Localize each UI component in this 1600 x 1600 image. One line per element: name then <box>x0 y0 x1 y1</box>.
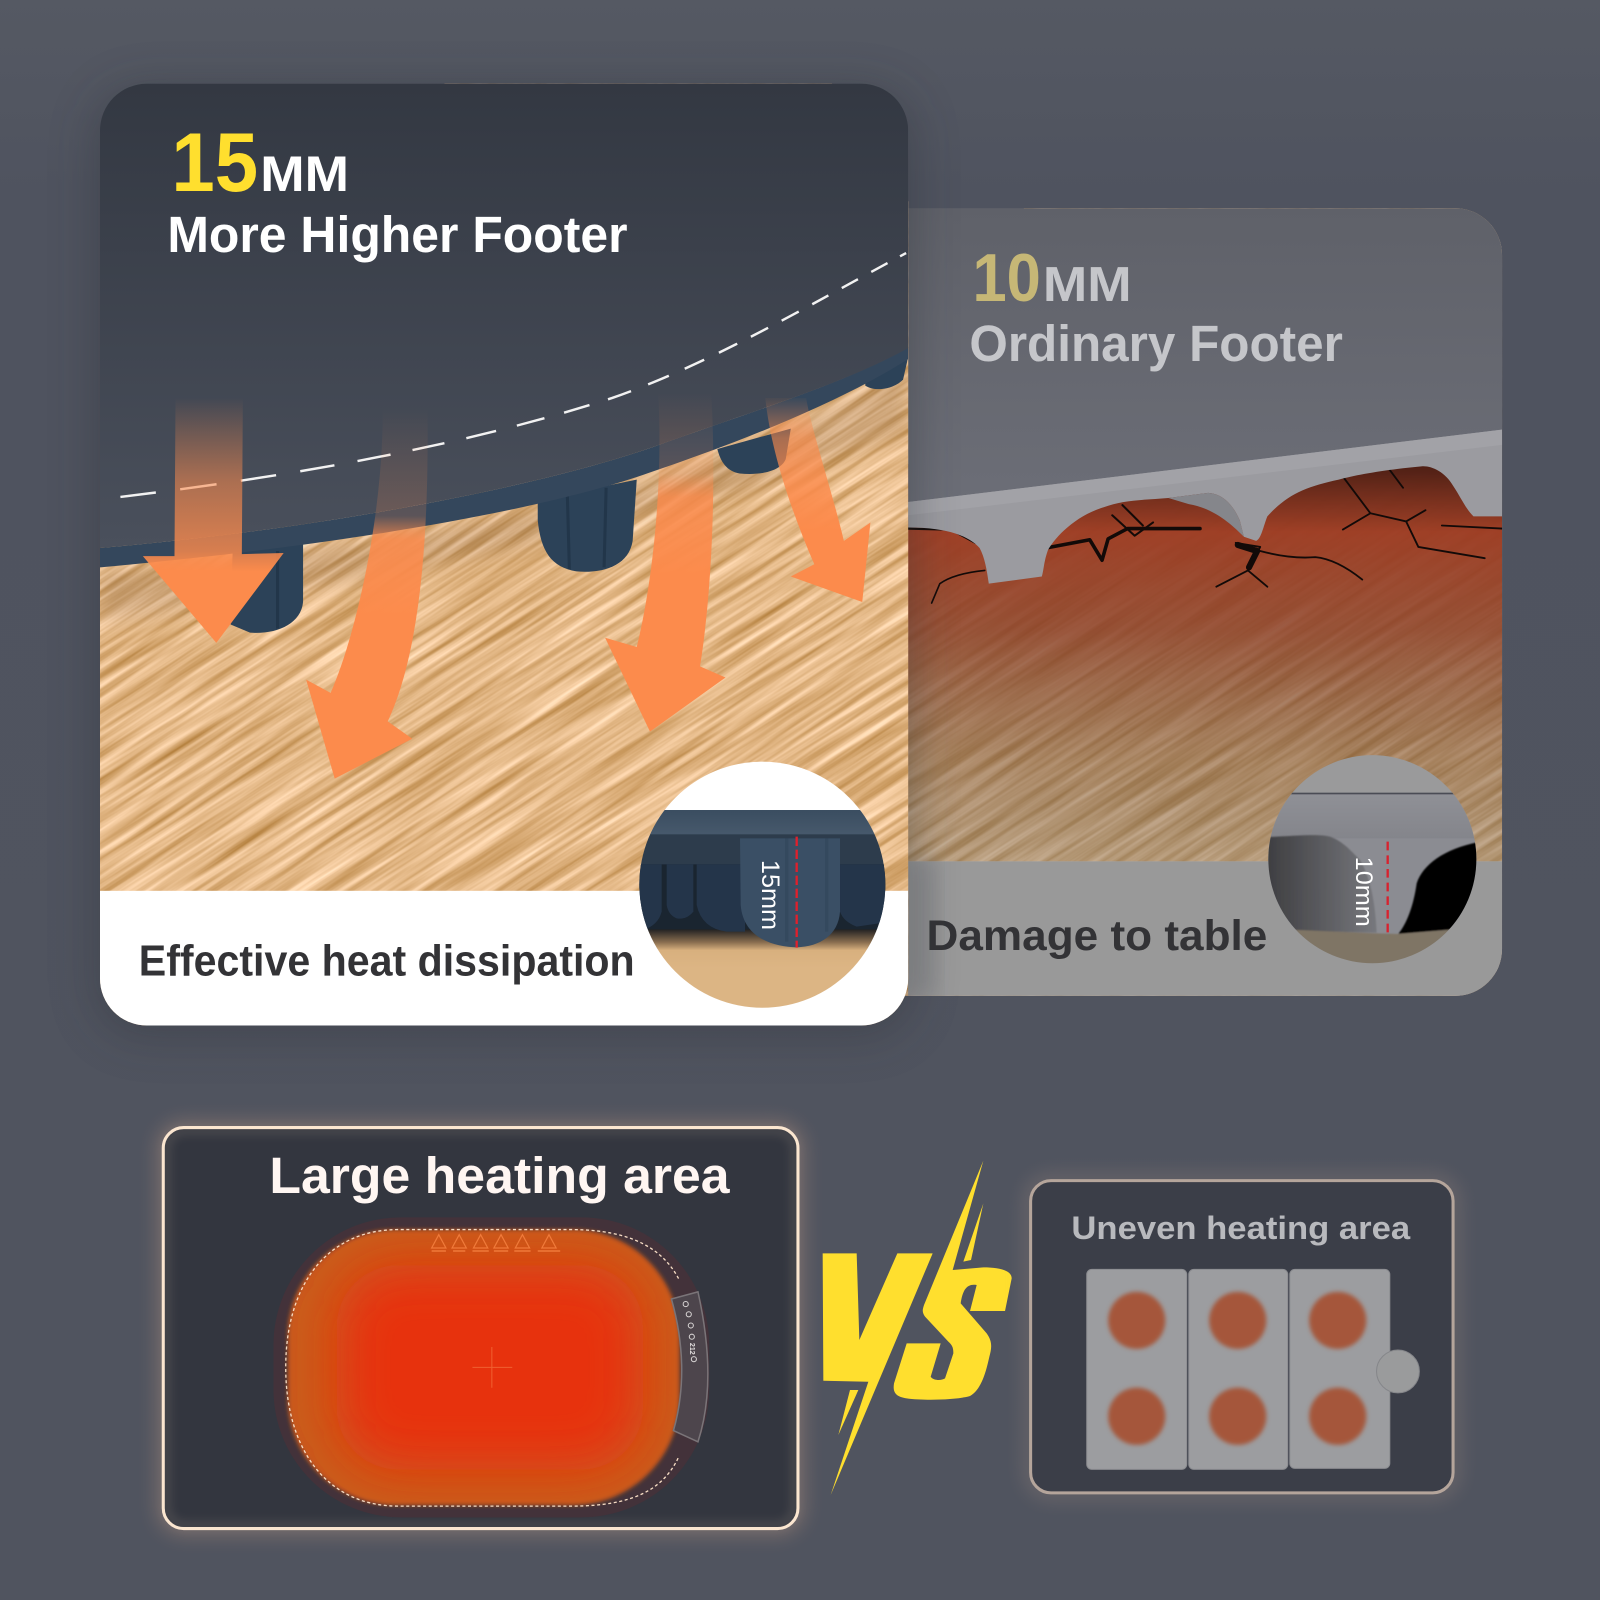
control panel <box>671 1292 708 1442</box>
heated mat <box>273 1217 709 1517</box>
inset: 15mm foot close-up <box>639 762 886 1008</box>
panel: 15mm footer <box>100 84 908 1026</box>
heading: 10mm ordinary footer <box>969 241 1343 372</box>
panel: uneven heating area <box>1031 1181 1453 1493</box>
heading: 15mm more higher footer: 15 <box>171 115 258 209</box>
heading: 15mm more higher footer: More Higher Footer <box>167 206 628 263</box>
panel: large heating area <box>163 1128 798 1529</box>
caption: damage to table: Damage to table <box>927 912 1267 960</box>
caption: effective heat dissipation: Effective heat dissipation <box>139 937 635 986</box>
VS lightning logo <box>823 1161 1012 1495</box>
warning icons <box>432 1235 560 1251</box>
10mm label: 10mm <box>1350 857 1377 927</box>
panel: ordinary footer <box>905 208 1502 996</box>
10mm measurement line <box>1384 842 1391 935</box>
shadow of main panel <box>94 88 914 1037</box>
heading: 10mm ordinary footer: 10 <box>972 241 1041 316</box>
table feet <box>231 357 908 633</box>
wood table <box>100 84 908 1026</box>
heat arrows <box>143 398 284 643</box>
product rim <box>100 347 908 567</box>
heading: 10mm ordinary footer: MM <box>1043 258 1132 312</box>
stitched dashed line <box>120 253 906 497</box>
control knob <box>1377 1350 1419 1393</box>
white caption strip <box>100 891 908 1026</box>
inset: 10mm foot close-up <box>1268 755 1476 964</box>
control panel: 212 <box>688 1343 696 1355</box>
pads <box>1087 1269 1390 1469</box>
product top surface <box>100 84 908 548</box>
15mm measurement line <box>793 837 800 948</box>
heat spots <box>1108 1292 1366 1445</box>
ordinary foot band <box>908 430 1502 584</box>
heading: uneven heating area: Uneven heating area <box>1071 1209 1411 1246</box>
heading: 15mm more higher footer: MM <box>260 146 349 202</box>
centre crosshair <box>472 1347 512 1388</box>
heading: 15mm more higher footer <box>167 115 628 263</box>
heading: large heating area: Large heating area <box>269 1147 730 1204</box>
table cracks <box>908 467 1502 603</box>
heading: 10mm ordinary footer: Ordinary Footer <box>969 315 1343 372</box>
15mm label: 15mm <box>756 860 784 930</box>
